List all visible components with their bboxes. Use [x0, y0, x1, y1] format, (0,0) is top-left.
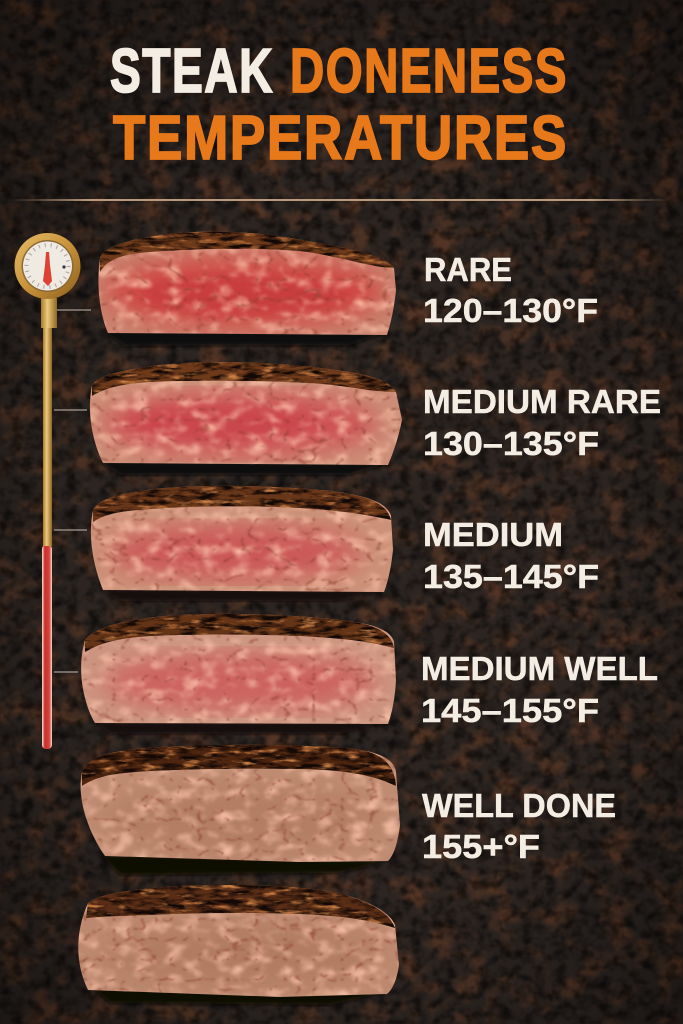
- label: medium: 135–145°F: [423, 558, 599, 595]
- steak 3 cut face: [90, 486, 393, 592]
- steak 6: extra well done: [72, 880, 404, 1005]
- divider line: [10, 199, 670, 201]
- steak 6 cut face: [72, 880, 404, 1000]
- steak 1 shadow: [100, 330, 388, 346]
- label: medium well: [421, 650, 658, 729]
- label: medium well: MEDIUM WELL: [421, 650, 658, 687]
- steak 3 shadow: [100, 589, 384, 601]
- steak 2 cut face: [90, 362, 402, 465]
- title word: temperatures: TEMPERATURES: [113, 104, 568, 173]
- thermometer tick marks: [54, 310, 91, 672]
- steak 2 crust: [92, 362, 396, 396]
- steak 2: medium rare: [82, 355, 407, 475]
- label: rare: 120–130°F: [423, 292, 598, 329]
- steak 5 crust: [82, 745, 396, 786]
- thermometer gold stem: [43, 326, 52, 546]
- steak 6 crust: [86, 885, 395, 928]
- label: well done: [422, 787, 616, 865]
- label: well done: WELL DONE: [422, 787, 616, 824]
- steak 1: rare: [90, 225, 405, 346]
- steak 6 shadow: [92, 988, 387, 1005]
- title word: steak: STEAK: [110, 37, 274, 106]
- thermometer gauge: [14, 233, 80, 299]
- steak 5 shadow: [100, 855, 388, 875]
- steak 4: medium well: [74, 608, 402, 734]
- title word: doneness: DONENESS: [290, 37, 568, 106]
- steak 1 cut face: [98, 232, 396, 335]
- label: medium rare: [423, 383, 661, 462]
- thermometer collar: [41, 298, 57, 328]
- label: medium: [423, 516, 599, 595]
- label: rare: RARE: [424, 251, 512, 288]
- label: medium rare: 130–135°F: [423, 425, 599, 462]
- thermometer: [14, 233, 91, 749]
- label: medium well: 145–155°F: [421, 692, 599, 729]
- steak 3 crust: [93, 486, 391, 522]
- label: rare: [423, 251, 598, 329]
- title: [110, 37, 568, 173]
- steak 5 cut face: [80, 744, 400, 862]
- thermometer red stem: [42, 545, 52, 749]
- label: well done: 155+°F: [422, 828, 540, 865]
- steak 4 cut face: [81, 614, 396, 724]
- steak 4 crust: [85, 614, 394, 652]
- steak 1 crust: [100, 232, 394, 272]
- label: medium: MEDIUM: [423, 516, 563, 553]
- steak 2 shadow: [98, 461, 390, 475]
- label: medium rare: MEDIUM RARE: [423, 383, 661, 420]
- steak 4 shadow: [95, 722, 386, 734]
- steak 5: well done: [74, 740, 406, 875]
- steak 3: medium: [84, 480, 399, 601]
